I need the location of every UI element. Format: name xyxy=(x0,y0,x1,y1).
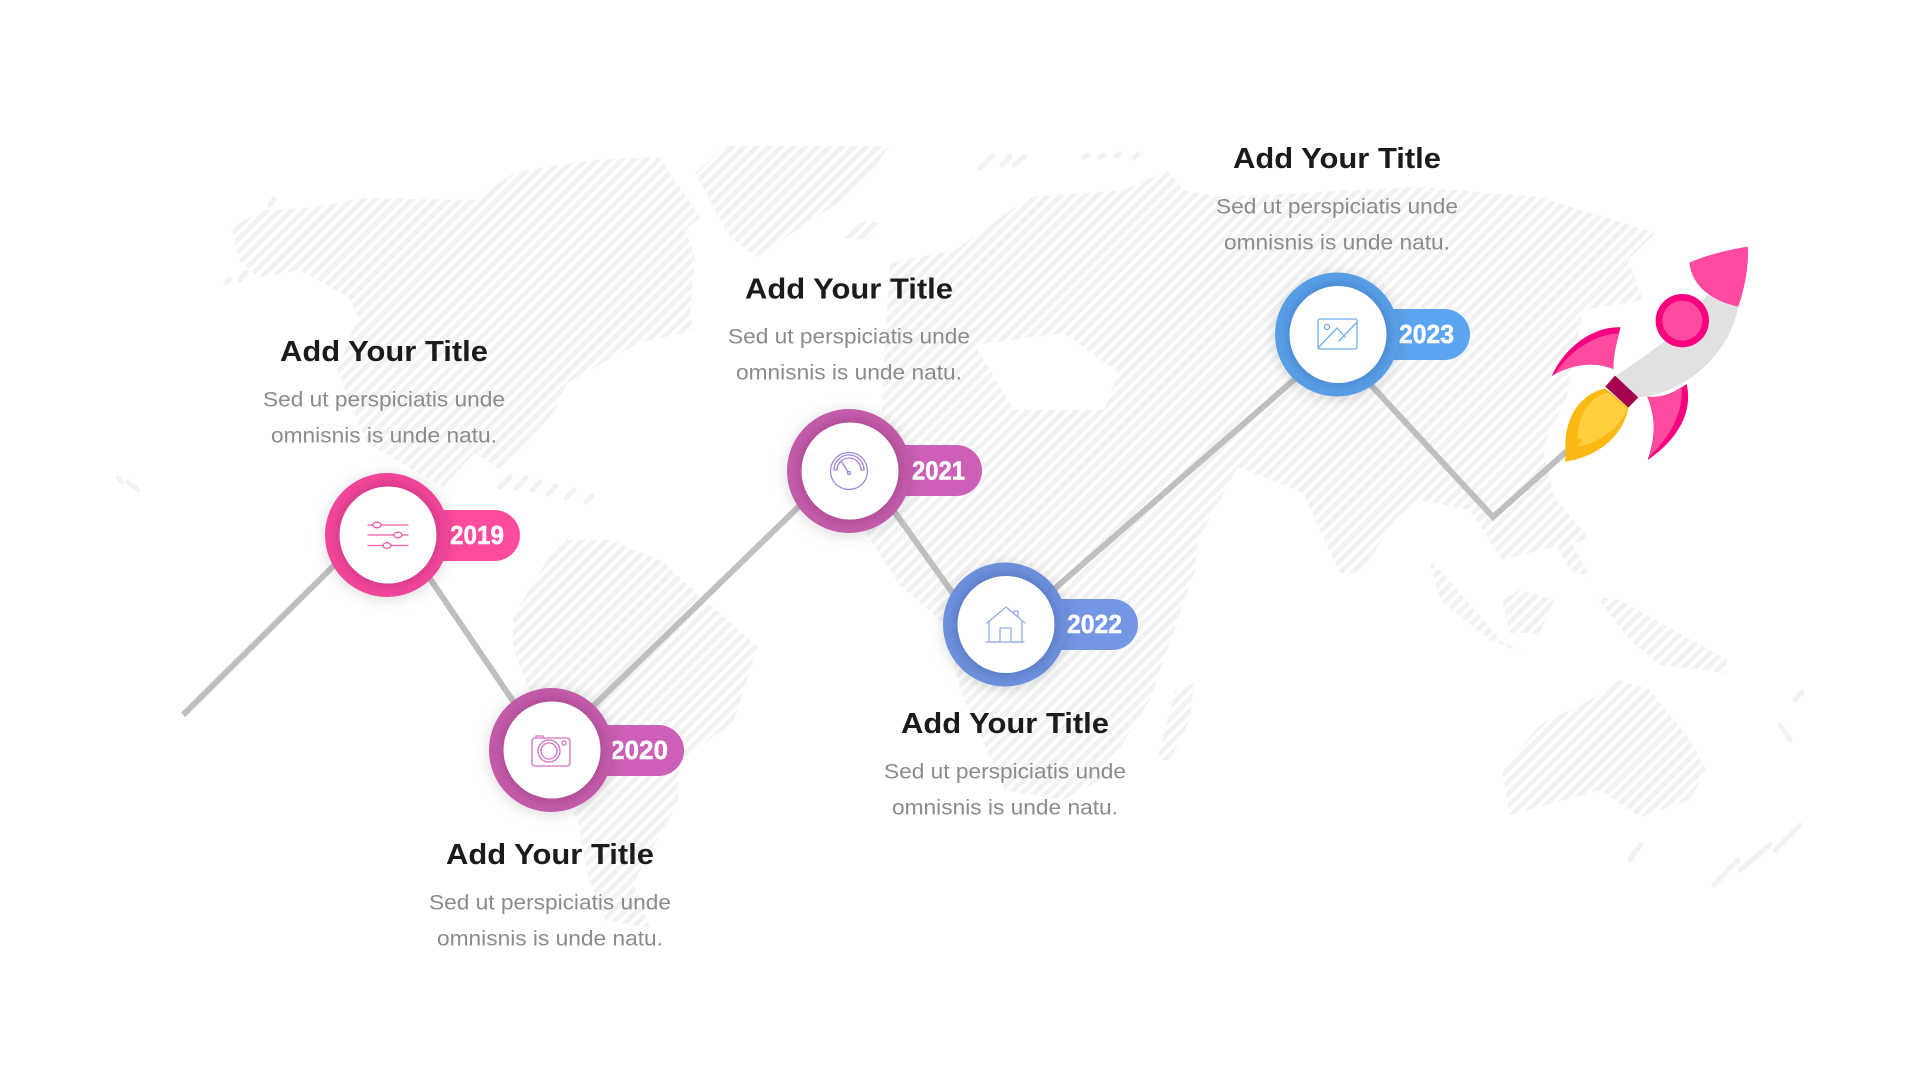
node: 2023: 2023 xyxy=(1399,319,1454,349)
text block: 2019: omnisnis is unde natu. xyxy=(271,424,497,448)
node: 2021: 2021 xyxy=(912,456,965,486)
text block: 2021: Sed ut perspiciatis unde xyxy=(728,324,970,348)
text block: 2023: Sed ut perspiciatis unde xyxy=(1216,194,1458,218)
node: 2019: 2019 xyxy=(450,520,504,550)
text block: 2022: omnisnis is unde natu. xyxy=(892,796,1118,820)
node: 2020 xyxy=(489,688,684,812)
text block: 2022 xyxy=(884,708,1126,820)
text block: 2022: Sed ut perspiciatis unde xyxy=(884,760,1126,784)
text block: 2023: omnisnis is unde natu. xyxy=(1224,230,1450,254)
timeline path xyxy=(183,345,1567,751)
node: 2022 xyxy=(943,562,1138,686)
text block: 2021: Add Your Title xyxy=(745,274,953,306)
node: 2023 xyxy=(1275,272,1470,396)
node: 2021 xyxy=(787,409,982,533)
text block: 2021 xyxy=(728,274,970,384)
node: 2019 xyxy=(325,473,520,597)
text block: 2022: Add Your Title xyxy=(901,708,1109,740)
text block: 2020: Sed ut perspiciatis unde xyxy=(429,890,671,914)
text block: 2023 xyxy=(1216,143,1458,254)
text block: 2019: Sed ut perspiciatis unde xyxy=(263,388,505,412)
node: 2020: 2020 xyxy=(610,735,668,765)
node: 2022: 2022 xyxy=(1067,609,1122,639)
icon: rocket xyxy=(1552,247,1748,462)
text block: 2019 xyxy=(263,336,505,448)
text block: 2020 xyxy=(429,839,671,950)
text block: 2023: Add Your Title xyxy=(1233,143,1441,175)
text block: 2020: omnisnis is unde natu. xyxy=(437,926,663,950)
world map background xyxy=(100,130,1820,960)
text block: 2020: Add Your Title xyxy=(446,839,654,871)
text block: 2019: Add Your Title xyxy=(280,336,488,368)
text block: 2021: omnisnis is unde natu. xyxy=(736,360,962,384)
